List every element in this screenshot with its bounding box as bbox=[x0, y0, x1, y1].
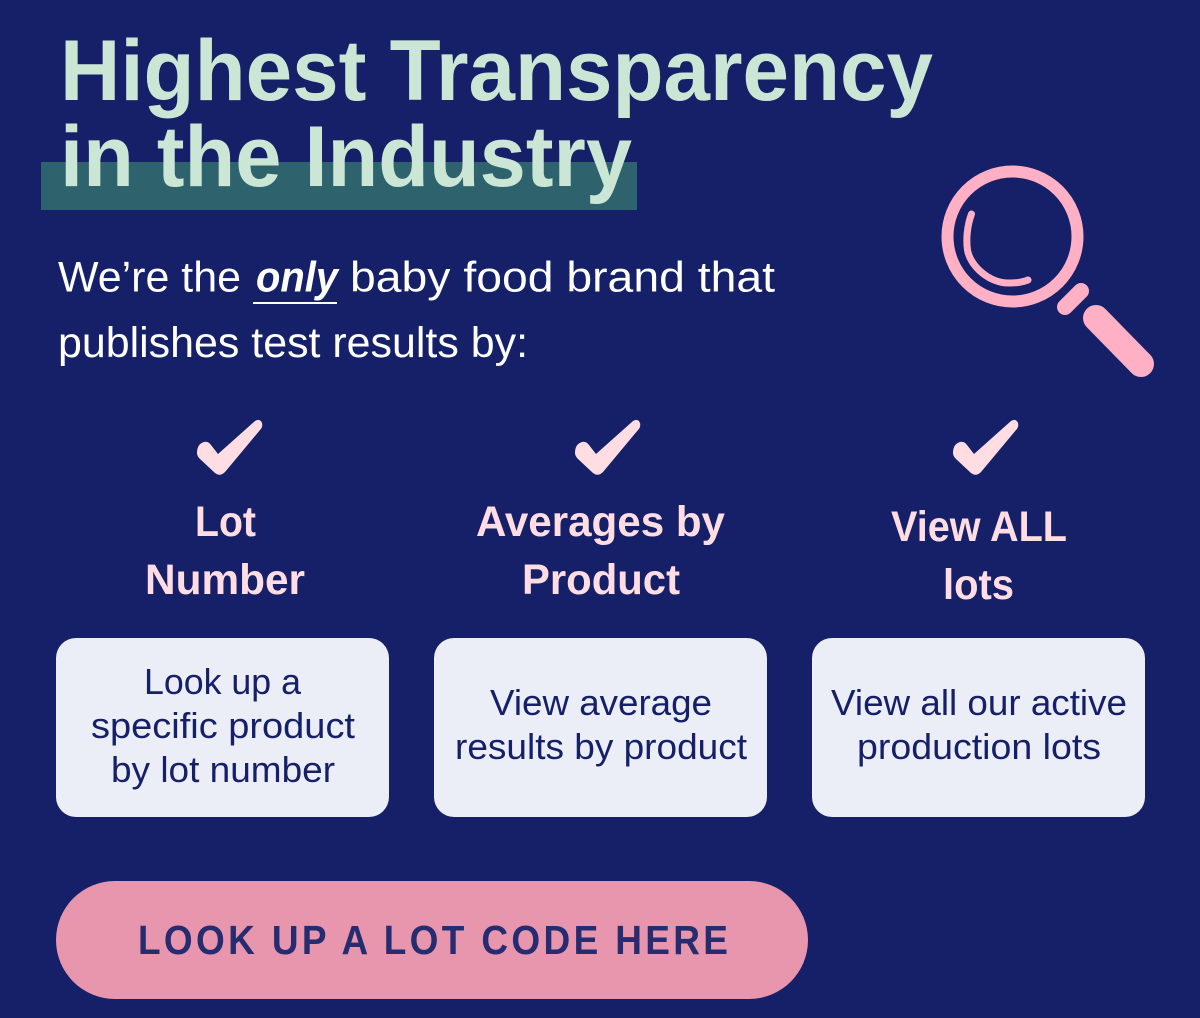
icon: check mark bbox=[953, 420, 1018, 475]
heading: averages by product bbox=[476, 498, 725, 604]
card: lot number: Look up a bbox=[144, 661, 302, 702]
title highlight band bbox=[41, 162, 637, 210]
heading: lot number: Number bbox=[145, 556, 305, 604]
button: look up a lot code bbox=[56, 881, 808, 999]
title line 2: in the Industry bbox=[60, 109, 632, 205]
heading: view all lots: View ALL bbox=[891, 503, 1067, 551]
intro text: We’re the bbox=[58, 254, 241, 302]
card: view all lots bbox=[812, 638, 1145, 817]
title bbox=[41, 23, 933, 210]
heading: lot number: Lot bbox=[195, 498, 256, 546]
card: view all lots: production lots bbox=[857, 726, 1101, 767]
column: view all lots bbox=[812, 420, 1145, 817]
icon: check mark bbox=[197, 420, 262, 475]
card: averages by product: View average bbox=[490, 682, 712, 723]
icon: check mark bbox=[575, 420, 640, 475]
icon: magnifying glass bbox=[948, 172, 1141, 364]
card: lot number: by lot number bbox=[111, 749, 335, 790]
heading: averages by product: Product bbox=[522, 556, 680, 604]
heading: lot number bbox=[145, 498, 305, 604]
intro text bbox=[58, 254, 775, 367]
heading: averages by product: Averages by bbox=[476, 498, 725, 546]
column: lot number bbox=[56, 420, 389, 817]
heading: view all lots bbox=[891, 503, 1067, 609]
button: look up a lot code: LOOK UP A LOT CODE HERE bbox=[138, 918, 728, 963]
card: lot number: specific product bbox=[91, 705, 355, 746]
column: averages by product bbox=[434, 420, 767, 817]
intro text: publishes test results by: bbox=[58, 319, 528, 367]
card: view all lots: View all our active bbox=[831, 682, 1127, 723]
card: lot number bbox=[56, 638, 389, 817]
card: averages by product bbox=[434, 638, 767, 817]
emphasised word: only: only bbox=[256, 254, 340, 302]
intro text: baby food brand that bbox=[350, 254, 775, 302]
heading: view all lots: lots bbox=[943, 561, 1014, 609]
card: averages by product: results by product bbox=[455, 726, 747, 767]
title line 1: Highest Transparency bbox=[60, 23, 933, 119]
